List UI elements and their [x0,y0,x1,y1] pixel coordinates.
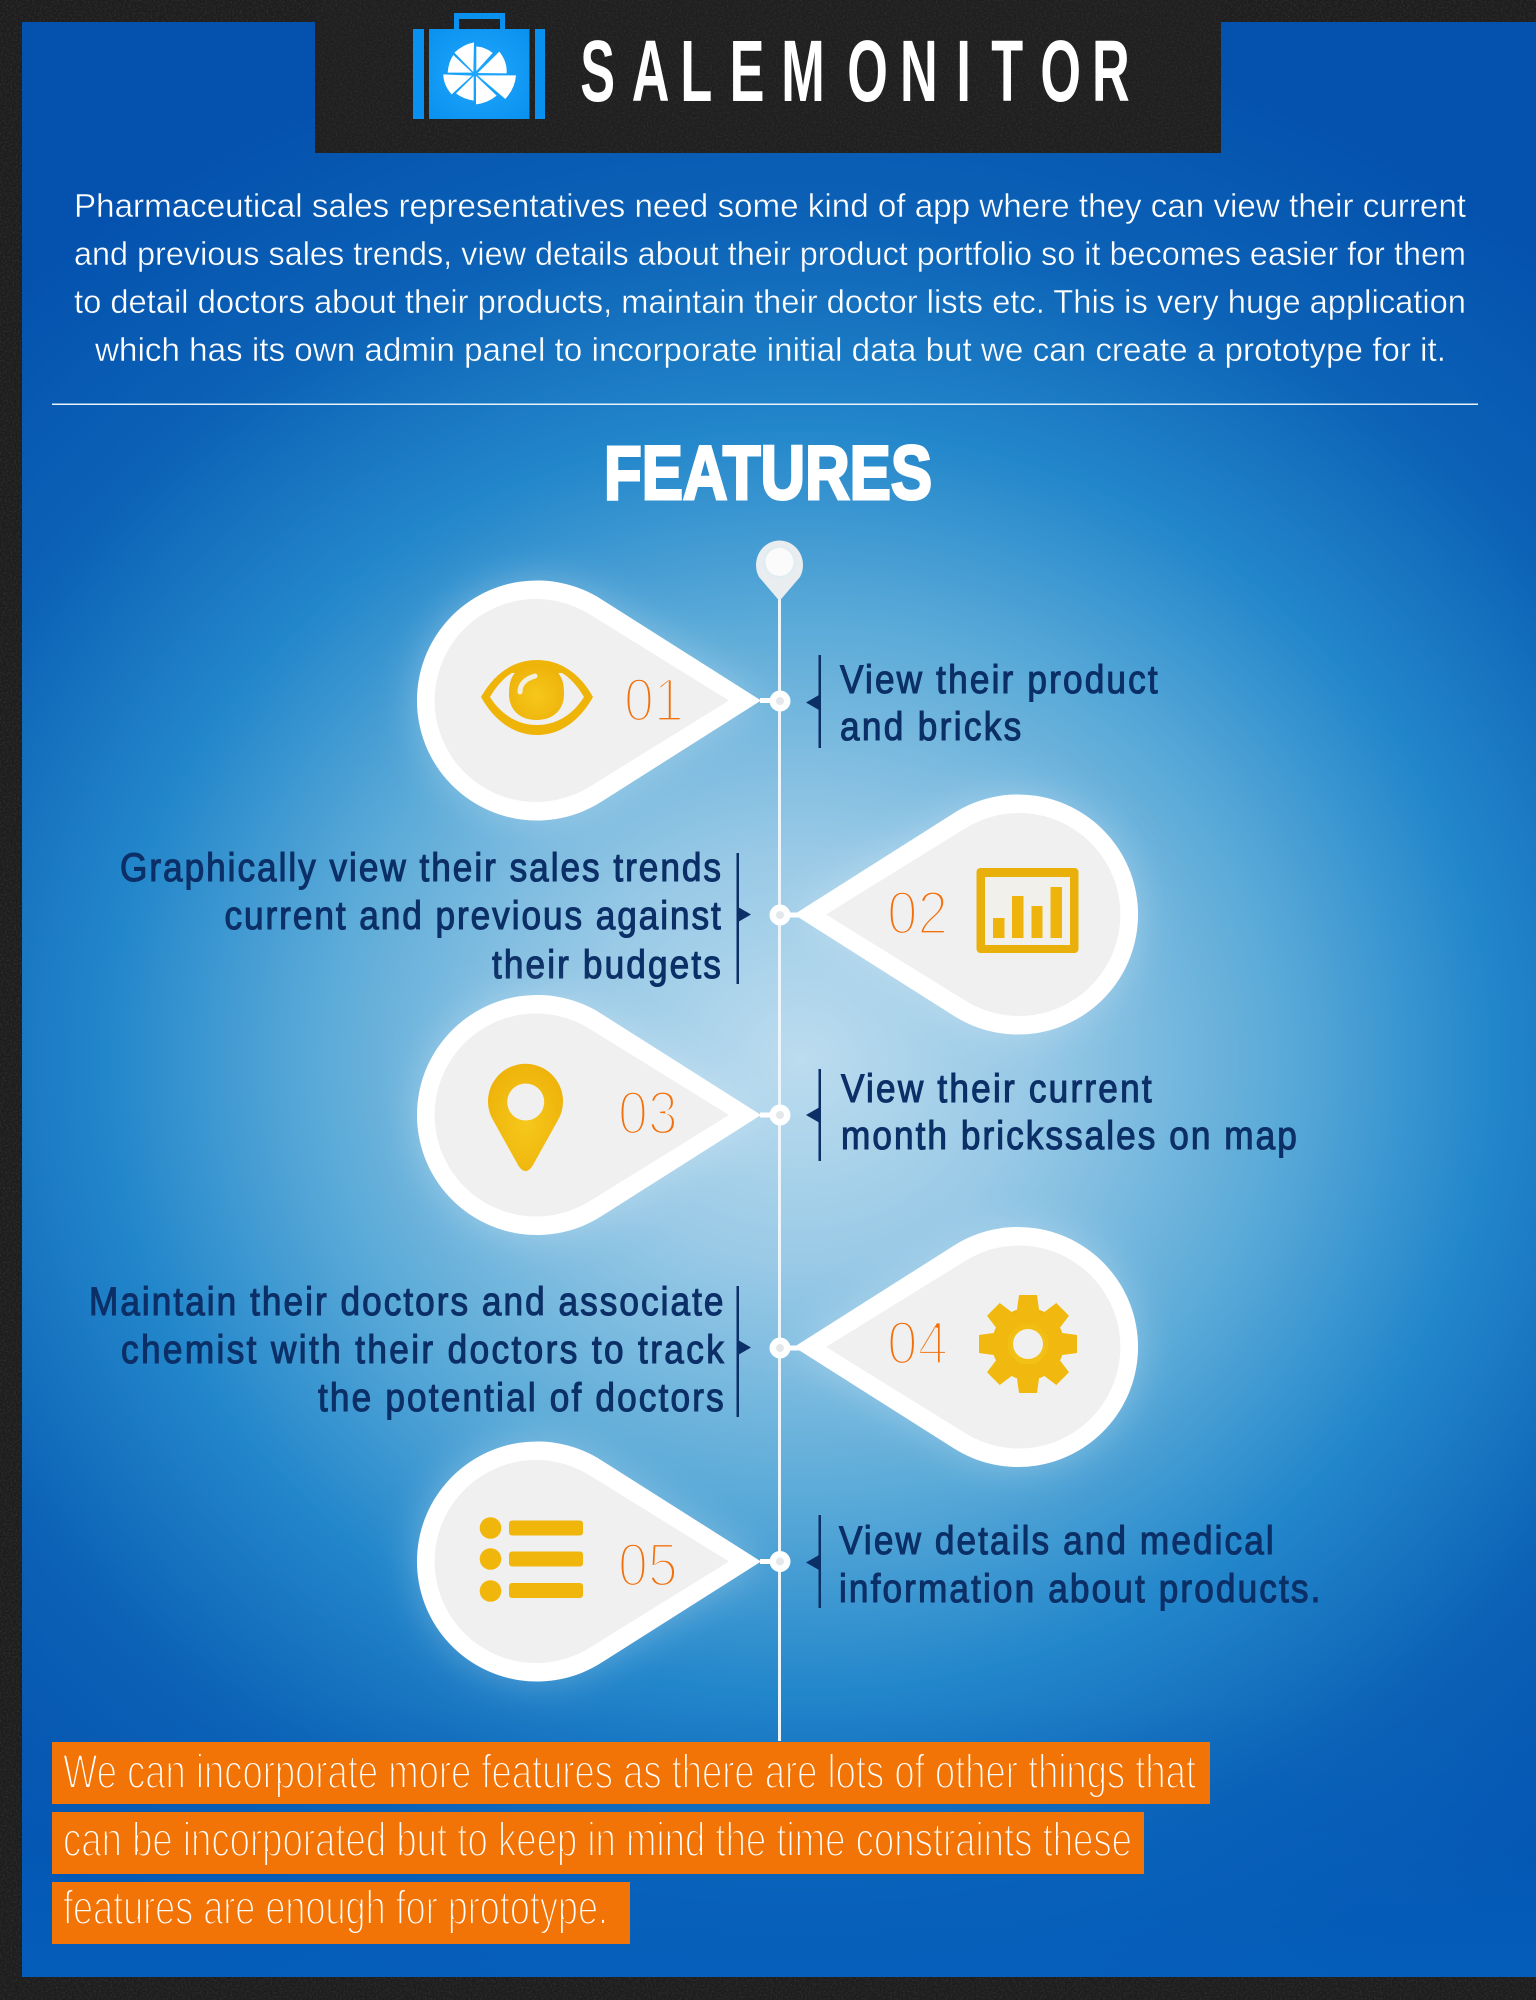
label 03: month brickssales on map [841,1113,1297,1157]
label 02: their budgets [492,942,721,986]
pin 03 [417,995,761,1235]
pin 02 [794,794,1138,1034]
heading: features: FEATURES [604,431,932,516]
label 02: current and previous against [224,893,721,937]
connector dot 04 [770,1338,800,1358]
intro paragraph: and previous sales trends, view details about their product portfolio so it becomes easier for them [74,235,1466,272]
label 05 [839,1518,1320,1610]
callout: closing note: can be incorporated but to keep in mind the time constraints these [63,1814,1132,1867]
icon: list [480,1517,583,1602]
label 02 [120,845,721,986]
callout: closing note: features are enough for prototype. [63,1882,608,1935]
icon: map pin [488,1064,563,1171]
label 03 [841,1066,1297,1157]
feature 04 [89,1227,1138,1467]
bracket 05 [806,1515,821,1608]
label 01 [840,657,1158,748]
pin 04 [794,1227,1138,1467]
intro paragraph: to detail doctors about their products, maintain their doctor lists etc. This is very huge application [74,283,1466,320]
intro paragraph: which has its own admin panel to incorporate initial data but we can create a prototype for it. [94,331,1446,368]
number 04: 04 [887,1309,948,1378]
feature 01 [417,580,1158,820]
feature 05 [417,1442,1320,1682]
pin 05 [417,1442,761,1682]
bracket 01 [806,655,821,748]
number 05: 05 [618,1532,678,1600]
logo wordmark: SALEMONITOR [580,23,1130,120]
pin 01 [417,580,761,820]
label 05: View details and medical [839,1518,1274,1562]
callout: closing note: We can incorporate more features as there are lots of other things that [63,1746,1196,1799]
timeline vertical line [778,598,781,1741]
bracket 04 [736,1286,751,1417]
label 02: Graphically view their sales trends [120,845,721,889]
bracket 02 [736,853,751,984]
label 01: and bricks [840,704,1021,748]
icon: gear [979,1295,1077,1393]
connector dot 03 [760,1104,790,1126]
feature 02 [120,794,1138,1034]
icon: eye [481,660,593,735]
feature 03 [417,995,1297,1235]
label 05: information about products. [839,1566,1320,1610]
intro paragraph [74,187,1466,368]
number 03: 03 [618,1080,678,1148]
icon: timeline top marker [756,541,803,601]
label 01: View their product [840,657,1158,701]
label 04: Maintain their doctors and associate [89,1279,723,1323]
connector dot 02 [770,904,800,926]
label 04: chemist with their doctors to track [121,1327,724,1371]
label 03: View their current [841,1066,1152,1110]
icon: briefcase logo [413,13,545,119]
bracket 03 [806,1069,821,1161]
number 02: 02 [887,879,948,948]
connector dot 05 [760,1551,790,1572]
number 01: 01 [624,667,684,735]
icon: bar chart [976,868,1078,953]
label 04 [89,1279,724,1419]
connector dot 01 [760,690,790,712]
intro paragraph: Pharmaceutical sales representatives need some kind of app where they can view their current [74,187,1466,224]
label 04: the potential of doctors [318,1375,724,1419]
callout: closing note [52,1742,1210,1944]
header band with logo [315,0,1221,153]
